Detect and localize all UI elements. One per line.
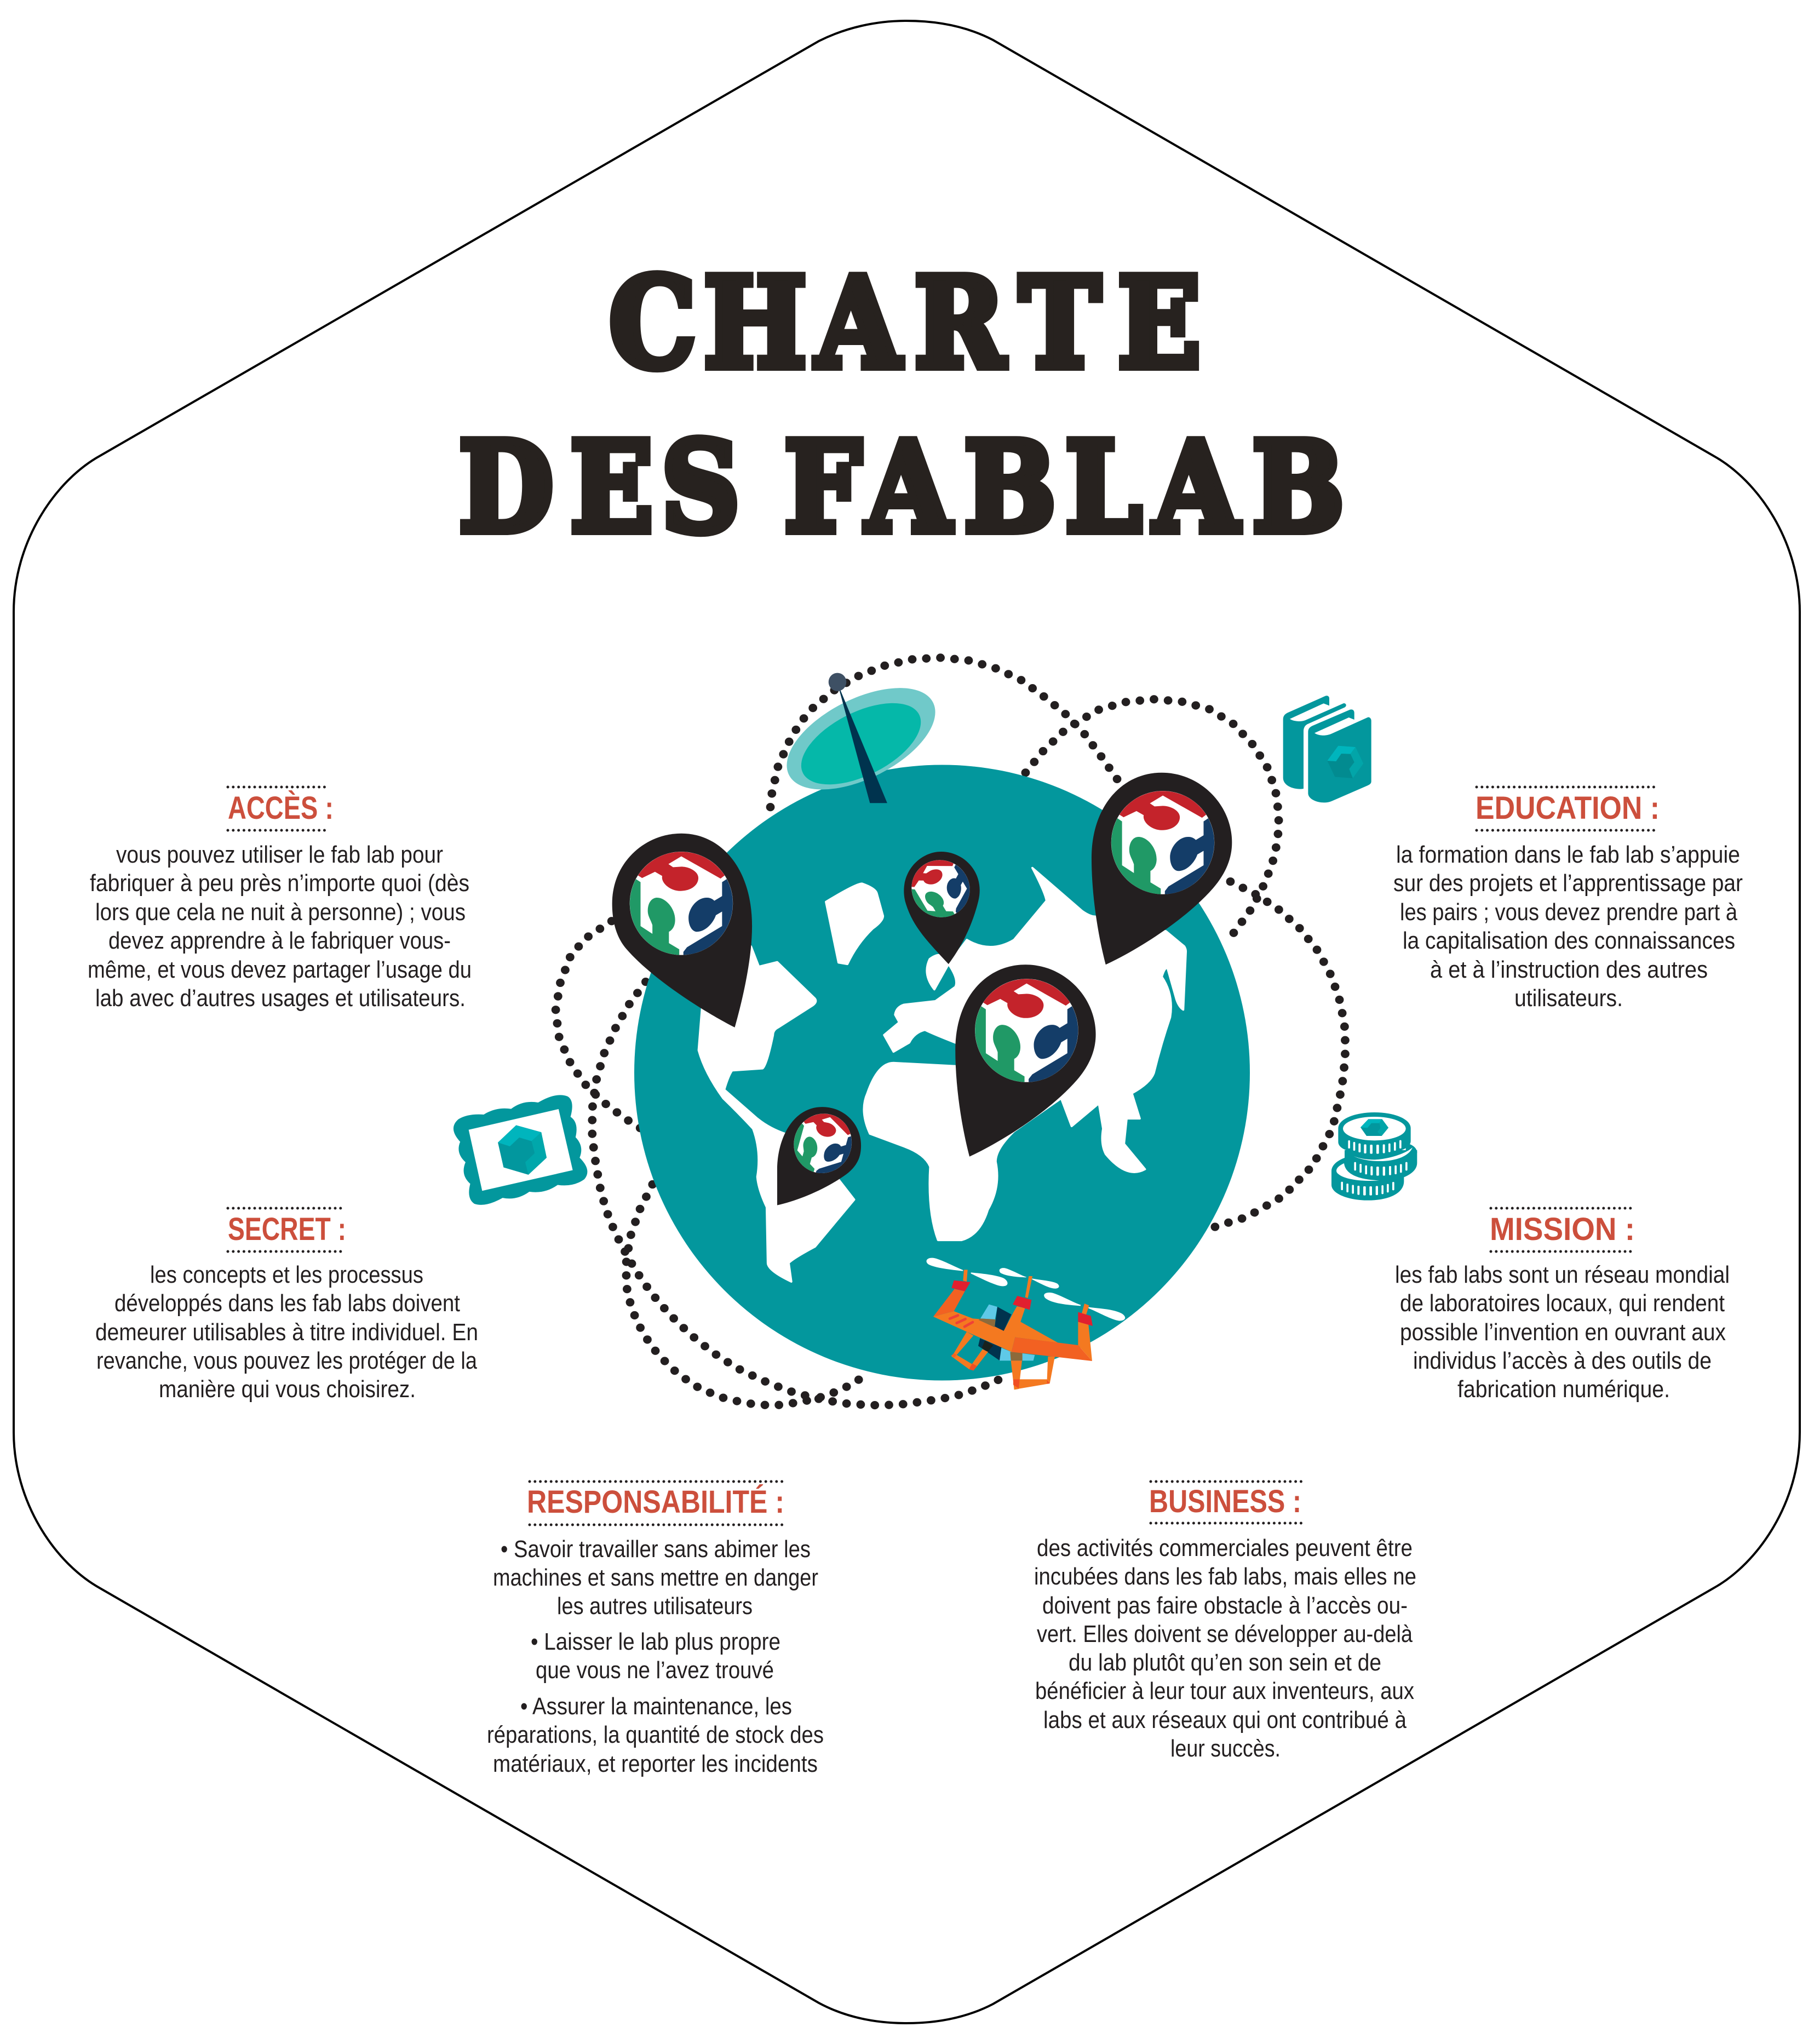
- icon: drone: [927, 1258, 1125, 1390]
- title: DES FABLAB: [459, 415, 1344, 560]
- heading: business: BUSINESS :: [1149, 1484, 1301, 1519]
- text: business: [1034, 1535, 1416, 1762]
- panel: mission: [1395, 1208, 1730, 1403]
- pin: centre: [955, 964, 1096, 1157]
- text: business: bénéficier à leur tour aux inventeurs, aux: [1035, 1678, 1414, 1704]
- text: business: vert. Elles doivent se développer au-delà: [1037, 1621, 1413, 1647]
- text: business: doivent pas faire obstacle à l’accès ou-: [1042, 1592, 1408, 1619]
- heading: responsabilité: RESPONSABILITÉ :: [527, 1484, 784, 1520]
- panel: responsabilité: [487, 1482, 824, 1777]
- heading: secret: SECRET :: [228, 1212, 346, 1247]
- icon: coins: [1331, 1112, 1417, 1201]
- icon: books: [1283, 696, 1371, 802]
- heading: accès: ACCÈS :: [228, 790, 334, 826]
- pin: right: [1092, 773, 1232, 964]
- text: mission: [1395, 1261, 1730, 1403]
- pole: [837, 683, 887, 803]
- text: mission: les fab labs sont un réseau mondial: [1395, 1261, 1730, 1288]
- text: accès: fabriquer à peu près n’importe quoi (dès: [90, 870, 469, 897]
- satellite: [770, 667, 952, 811]
- pin: left: [612, 834, 752, 1027]
- text: business: leur succès.: [1170, 1735, 1281, 1762]
- text: education: utilisateurs.: [1514, 985, 1623, 1012]
- text: business: des activités commerciales peuvent être: [1037, 1535, 1413, 1561]
- globe: [634, 765, 1250, 1380]
- text: education: les pairs ; vous devez prendre part à: [1400, 899, 1737, 926]
- text: responsabilité: réparations, la quantité de stock des: [487, 1721, 824, 1748]
- text: accès: devez apprendre à le fabriquer vous-: [108, 927, 451, 954]
- text: accès: même, et vous devez partager l’usage du: [88, 956, 472, 983]
- continents: [699, 868, 1186, 1282]
- text: education: la capitalisation des connaissances: [1403, 927, 1735, 954]
- text: accès: lab avec d’autres usages et utilisateurs.: [95, 985, 466, 1012]
- title: [459, 251, 1344, 560]
- text: business: incubées dans les fab labs, mais elles ne: [1034, 1563, 1416, 1590]
- heading: education: EDUCATION :: [1476, 790, 1660, 826]
- text: education: à et à l’instruction des autres: [1430, 956, 1708, 983]
- text: accès: vous pouvez utiliser le fab lab pour: [116, 841, 443, 868]
- ball: [829, 673, 846, 691]
- text: secret: développés dans les fab labs doivent: [114, 1290, 460, 1317]
- text: mission: fabrication numérique.: [1457, 1376, 1670, 1403]
- text: secret: revanche, vous pouvez les protéger de la: [96, 1347, 477, 1374]
- title: CHARTE: [609, 251, 1201, 396]
- text: education: sur des projets et l’apprentissage par: [1393, 870, 1743, 897]
- text: secret: [95, 1261, 478, 1403]
- text: responsabilité: que vous ne l’avez trouvé: [536, 1657, 774, 1684]
- dish: [770, 667, 952, 811]
- panel: business: [1034, 1482, 1416, 1762]
- panel: accès: [88, 787, 472, 1012]
- icon: frame: [454, 1095, 587, 1205]
- text: mission: de laboratoires locaux, qui rendent: [1400, 1290, 1725, 1317]
- heading: mission: MISSION :: [1490, 1212, 1635, 1247]
- text: responsabilité: [487, 1536, 824, 1777]
- panel: secret: [95, 1208, 478, 1403]
- text: mission: possible l’invention en ouvrant aux: [1400, 1319, 1726, 1346]
- text: responsabilité: • Assurer la maintenance, les: [520, 1693, 792, 1720]
- text: responsabilité: • Laisser le lab plus propre: [531, 1628, 780, 1655]
- text: responsabilité: matériaux, et reporter les incidents: [493, 1750, 818, 1777]
- text: education: [1393, 841, 1743, 1012]
- text: responsabilité: • Savoir travailler sans abimer les: [501, 1536, 811, 1563]
- text: secret: manière qui vous choisirez.: [159, 1376, 416, 1403]
- text: secret: demeurer utilisables à titre individuel. En: [95, 1319, 478, 1346]
- text: responsabilité: les autres utilisateurs: [557, 1593, 753, 1620]
- text: responsabilité: machines et sans mettre en danger: [493, 1564, 818, 1591]
- panel: education: [1393, 787, 1743, 1012]
- pin: small top: [901, 849, 980, 964]
- illustration: dotted orbits: [555, 658, 1345, 1406]
- text: accès: lors que cela ne nuit à personne) ; vous: [95, 899, 466, 926]
- text: business: du lab plutôt qu’en son sein et de: [1069, 1649, 1381, 1676]
- map pins: [612, 773, 1232, 1205]
- text: business: labs et aux réseaux qui ont contribué à: [1043, 1707, 1407, 1733]
- text: secret: les concepts et les processus: [150, 1261, 423, 1288]
- text: mission: individus l’accès à des outils de: [1413, 1347, 1712, 1374]
- text: education: la formation dans le fab lab s’appuie: [1396, 841, 1740, 868]
- pin: small bottom: [777, 1107, 861, 1205]
- text: accès: [88, 841, 472, 1012]
